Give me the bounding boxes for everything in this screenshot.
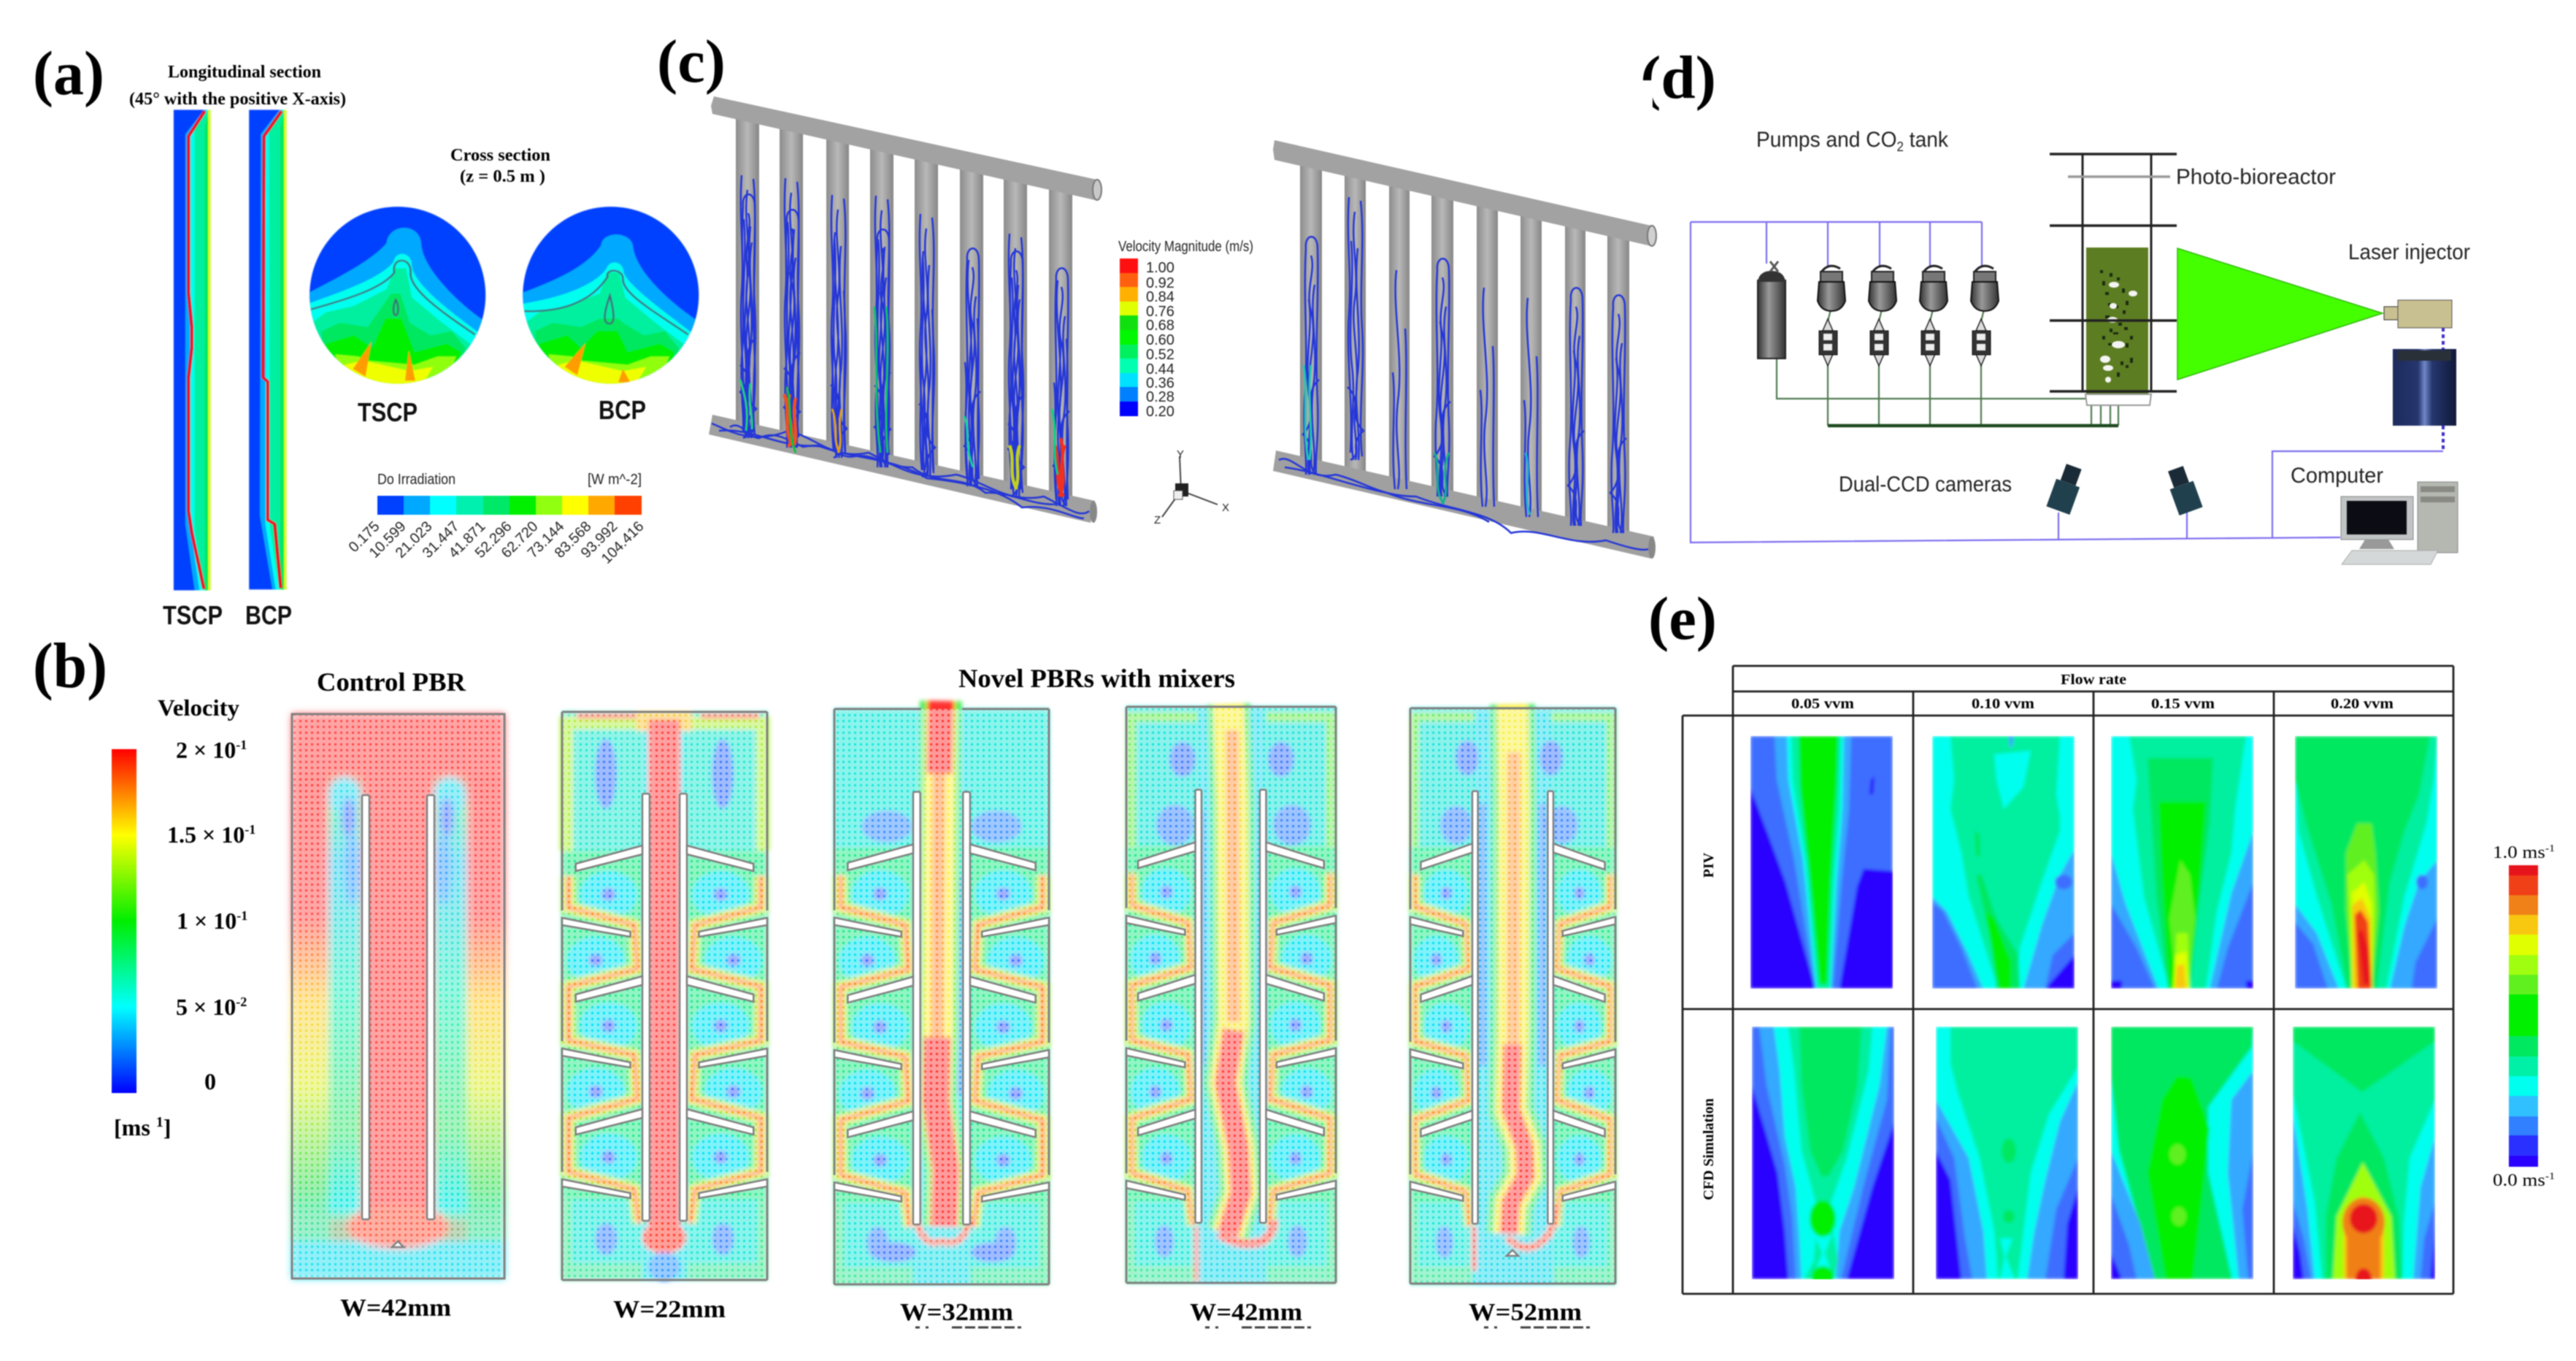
flow panel: mixer W=52 <box>1410 705 1616 1284</box>
legend tick values: 52.296 <box>472 518 515 561</box>
heading: longitudinal section: Longitudinal section <box>168 63 321 82</box>
legend unit: [W m^-2] <box>588 472 642 488</box>
legend tick values: 31.447 <box>420 518 463 561</box>
legend bottom value: 0.0 ms <box>2493 1171 2540 1190</box>
legend values: 0.20 <box>1146 404 1174 420</box>
label (d): (d) <box>1640 44 1716 112</box>
legend values: 1.00 <box>1146 260 1174 276</box>
photo-bioreactor column <box>2050 154 2177 405</box>
velocity ticks: -2 <box>236 994 247 1009</box>
legend title velocity: Velocity <box>158 694 239 721</box>
velocity ticks: 2 × 10 <box>176 737 236 763</box>
contour: PIV 0.15 <box>2111 736 2253 989</box>
flow panel: mixer W=32 <box>834 701 1049 1284</box>
header 0.05: 0.05 vvm <box>1791 696 1854 712</box>
label dual CCD: Dual-CCD cameras <box>1839 472 2012 497</box>
cross section: BCP <box>520 205 702 390</box>
legend: 0 to 1 m/s <box>2493 843 2555 1190</box>
legend title: Do Irradiation <box>377 472 455 488</box>
clipped text remnant <box>1484 1326 1590 1329</box>
legend tick values: 41.871 <box>446 518 489 561</box>
legend values: 0.52 <box>1146 347 1174 363</box>
strip: TSCP longitudinal <box>174 110 210 590</box>
table grid <box>1683 666 2453 1294</box>
velocity ticks: -1 <box>245 822 255 837</box>
laser injector <box>2384 300 2452 328</box>
CCD camera 2 <box>2164 464 2203 515</box>
panel: (c) streamlines <box>657 28 1656 559</box>
legend values: 0.92 <box>1146 275 1174 291</box>
legend values: 0.68 <box>1146 318 1174 334</box>
velocity ticks: [ms <box>114 1114 150 1140</box>
clipped text remnant <box>915 1326 1021 1329</box>
label (a): (a) <box>33 38 104 108</box>
label BCP circle: BCP <box>599 395 646 425</box>
flow panel: mixer W=22 <box>562 712 767 1281</box>
label W=42mm control: W=42mm <box>340 1295 451 1322</box>
pumps <box>1818 266 1999 311</box>
pipe array right <box>1273 140 1656 559</box>
legend top value: 1.0 ms <box>2493 843 2540 862</box>
legend values: 0.84 <box>1146 289 1174 305</box>
flow meters <box>1819 319 1991 366</box>
legend values <box>1146 260 1174 420</box>
gas tubing <box>1777 307 2118 426</box>
legend values: 0.76 <box>1146 304 1174 320</box>
header flow rate: Flow rate <box>2061 672 2126 688</box>
axis triad: Y <box>1177 448 1184 461</box>
label W=22mm: W=22mm <box>613 1296 726 1323</box>
legend top value: -1 <box>2545 843 2555 854</box>
legend tick values: 21.023 <box>393 518 436 561</box>
heading: cross section: Cross section <box>450 146 550 165</box>
legend: velocity magnitude <box>1118 239 1253 420</box>
laser sheet <box>2177 248 2383 380</box>
pipe array left <box>709 96 1101 523</box>
control wiring <box>1691 222 2443 543</box>
label W=42mm mixer: W=42mm <box>1190 1299 1302 1326</box>
legend tick values: 0.175 <box>346 518 383 556</box>
label (c): (c) <box>657 28 726 96</box>
label TSCP strip: TSCP <box>163 600 223 630</box>
heading: control PBR: Control PBR <box>317 667 466 697</box>
legend tick values: 10.599 <box>366 518 410 561</box>
contour: CFD 0.05 <box>1752 1027 1894 1287</box>
legend tick values: 73.144 <box>525 518 568 561</box>
contour: CFD 0.20 <box>2293 1027 2435 1289</box>
velocity ticks: -1 <box>236 737 247 752</box>
contour: PIV 0.10 <box>1932 736 2075 989</box>
legend bottom value: -1 <box>2545 1171 2555 1182</box>
heading: angle note: (45° with the positive X-axis) <box>129 90 346 109</box>
label (b): (b) <box>33 631 107 702</box>
label pumps and CO2: Pumps and CO <box>1756 128 1906 152</box>
heading: novel PBRs: Novel PBRs with mixers <box>958 664 1235 693</box>
contour: CFD 0.15 <box>2111 1027 2253 1279</box>
legend values: 0.60 <box>1146 332 1174 348</box>
velocity ticks: 1 <box>156 1114 164 1130</box>
laser power unit <box>2393 349 2456 426</box>
velocity ticks: 0 <box>204 1068 216 1094</box>
legend values: 0.44 <box>1146 361 1174 377</box>
computer <box>2341 482 2458 564</box>
legend tick values: 93.992 <box>578 518 621 561</box>
row label CFD: CFD Simulation <box>1701 1098 1717 1200</box>
contour: PIV 0.05 <box>1750 736 1893 989</box>
streamlines left <box>712 175 1089 518</box>
cross section: TSCP <box>307 205 489 390</box>
legend tick values <box>346 518 647 567</box>
panel: (d) PIV setup schematic <box>1635 44 2470 564</box>
label BCP strip: BCP <box>245 600 292 630</box>
streamlines right <box>1279 197 1648 550</box>
panel: (b) velocity fields <box>33 631 1616 1327</box>
label photo-bioreactor: Photo-bioreactor <box>2176 165 2336 189</box>
legend tick values: 104.416 <box>599 518 647 567</box>
label W=52mm: W=52mm <box>1469 1299 1582 1326</box>
axis triad: Z <box>1154 514 1161 526</box>
contour: PIV 0.20 <box>2295 736 2437 989</box>
legend title: Velocity Magnitude (m/s) <box>1118 239 1253 255</box>
row label PIV: PIV <box>1701 852 1717 878</box>
axis triad <box>1154 448 1229 526</box>
header 0.10: 0.10 vvm <box>1972 696 2034 712</box>
velocity ticks: 5 × 10 <box>176 994 236 1020</box>
velocity ticks: -1 <box>237 908 247 923</box>
CCD camera 1 <box>2046 462 2085 515</box>
legend tick values: 62.720 <box>499 518 542 561</box>
label computer: Computer <box>2291 464 2383 488</box>
legend tick values: 83.568 <box>552 518 595 561</box>
legend: DO irradiation <box>346 472 647 567</box>
legend colour bar <box>377 496 642 515</box>
clipped text remnant <box>1205 1326 1311 1329</box>
panel: (a) irradiation <box>33 38 702 630</box>
header 0.20: 0.20 vvm <box>2331 696 2394 712</box>
flow panel: mixer W=42 <box>1126 705 1336 1283</box>
contour: CFD 0.10 <box>1936 1027 2078 1279</box>
heading: z position: (z = 0.5 m ) <box>460 167 545 186</box>
label (e): (e) <box>1648 585 1717 653</box>
velocity ticks: ] <box>164 1114 171 1140</box>
legend colour bar <box>2509 865 2538 1167</box>
legend values: 0.28 <box>1146 389 1174 405</box>
label pumps and CO2: 2 <box>1897 139 1904 154</box>
colour bar velocity <box>112 749 137 1093</box>
label W=32mm: W=32mm <box>900 1299 1013 1326</box>
velocity ticks <box>114 737 255 1140</box>
label TSCP circle: TSCP <box>358 397 418 427</box>
header 0.15: 0.15 vvm <box>2151 696 2215 712</box>
legend colour bar <box>1120 258 1138 416</box>
label laser injector: Laser injector <box>2348 240 2470 264</box>
velocity ticks: 1.5 × 10 <box>167 821 245 848</box>
label pumps and CO2: tank <box>1904 128 1949 152</box>
legend values: 0.36 <box>1146 375 1174 391</box>
CO2 tank <box>1758 261 1785 359</box>
strip: BCP longitudinal <box>249 110 286 589</box>
flow panel: control W=42 <box>292 714 504 1278</box>
panel: (e) velocity table <box>1648 585 2555 1294</box>
velocity ticks: 1 × 10 <box>177 908 237 934</box>
axis triad: X <box>1222 502 1229 514</box>
